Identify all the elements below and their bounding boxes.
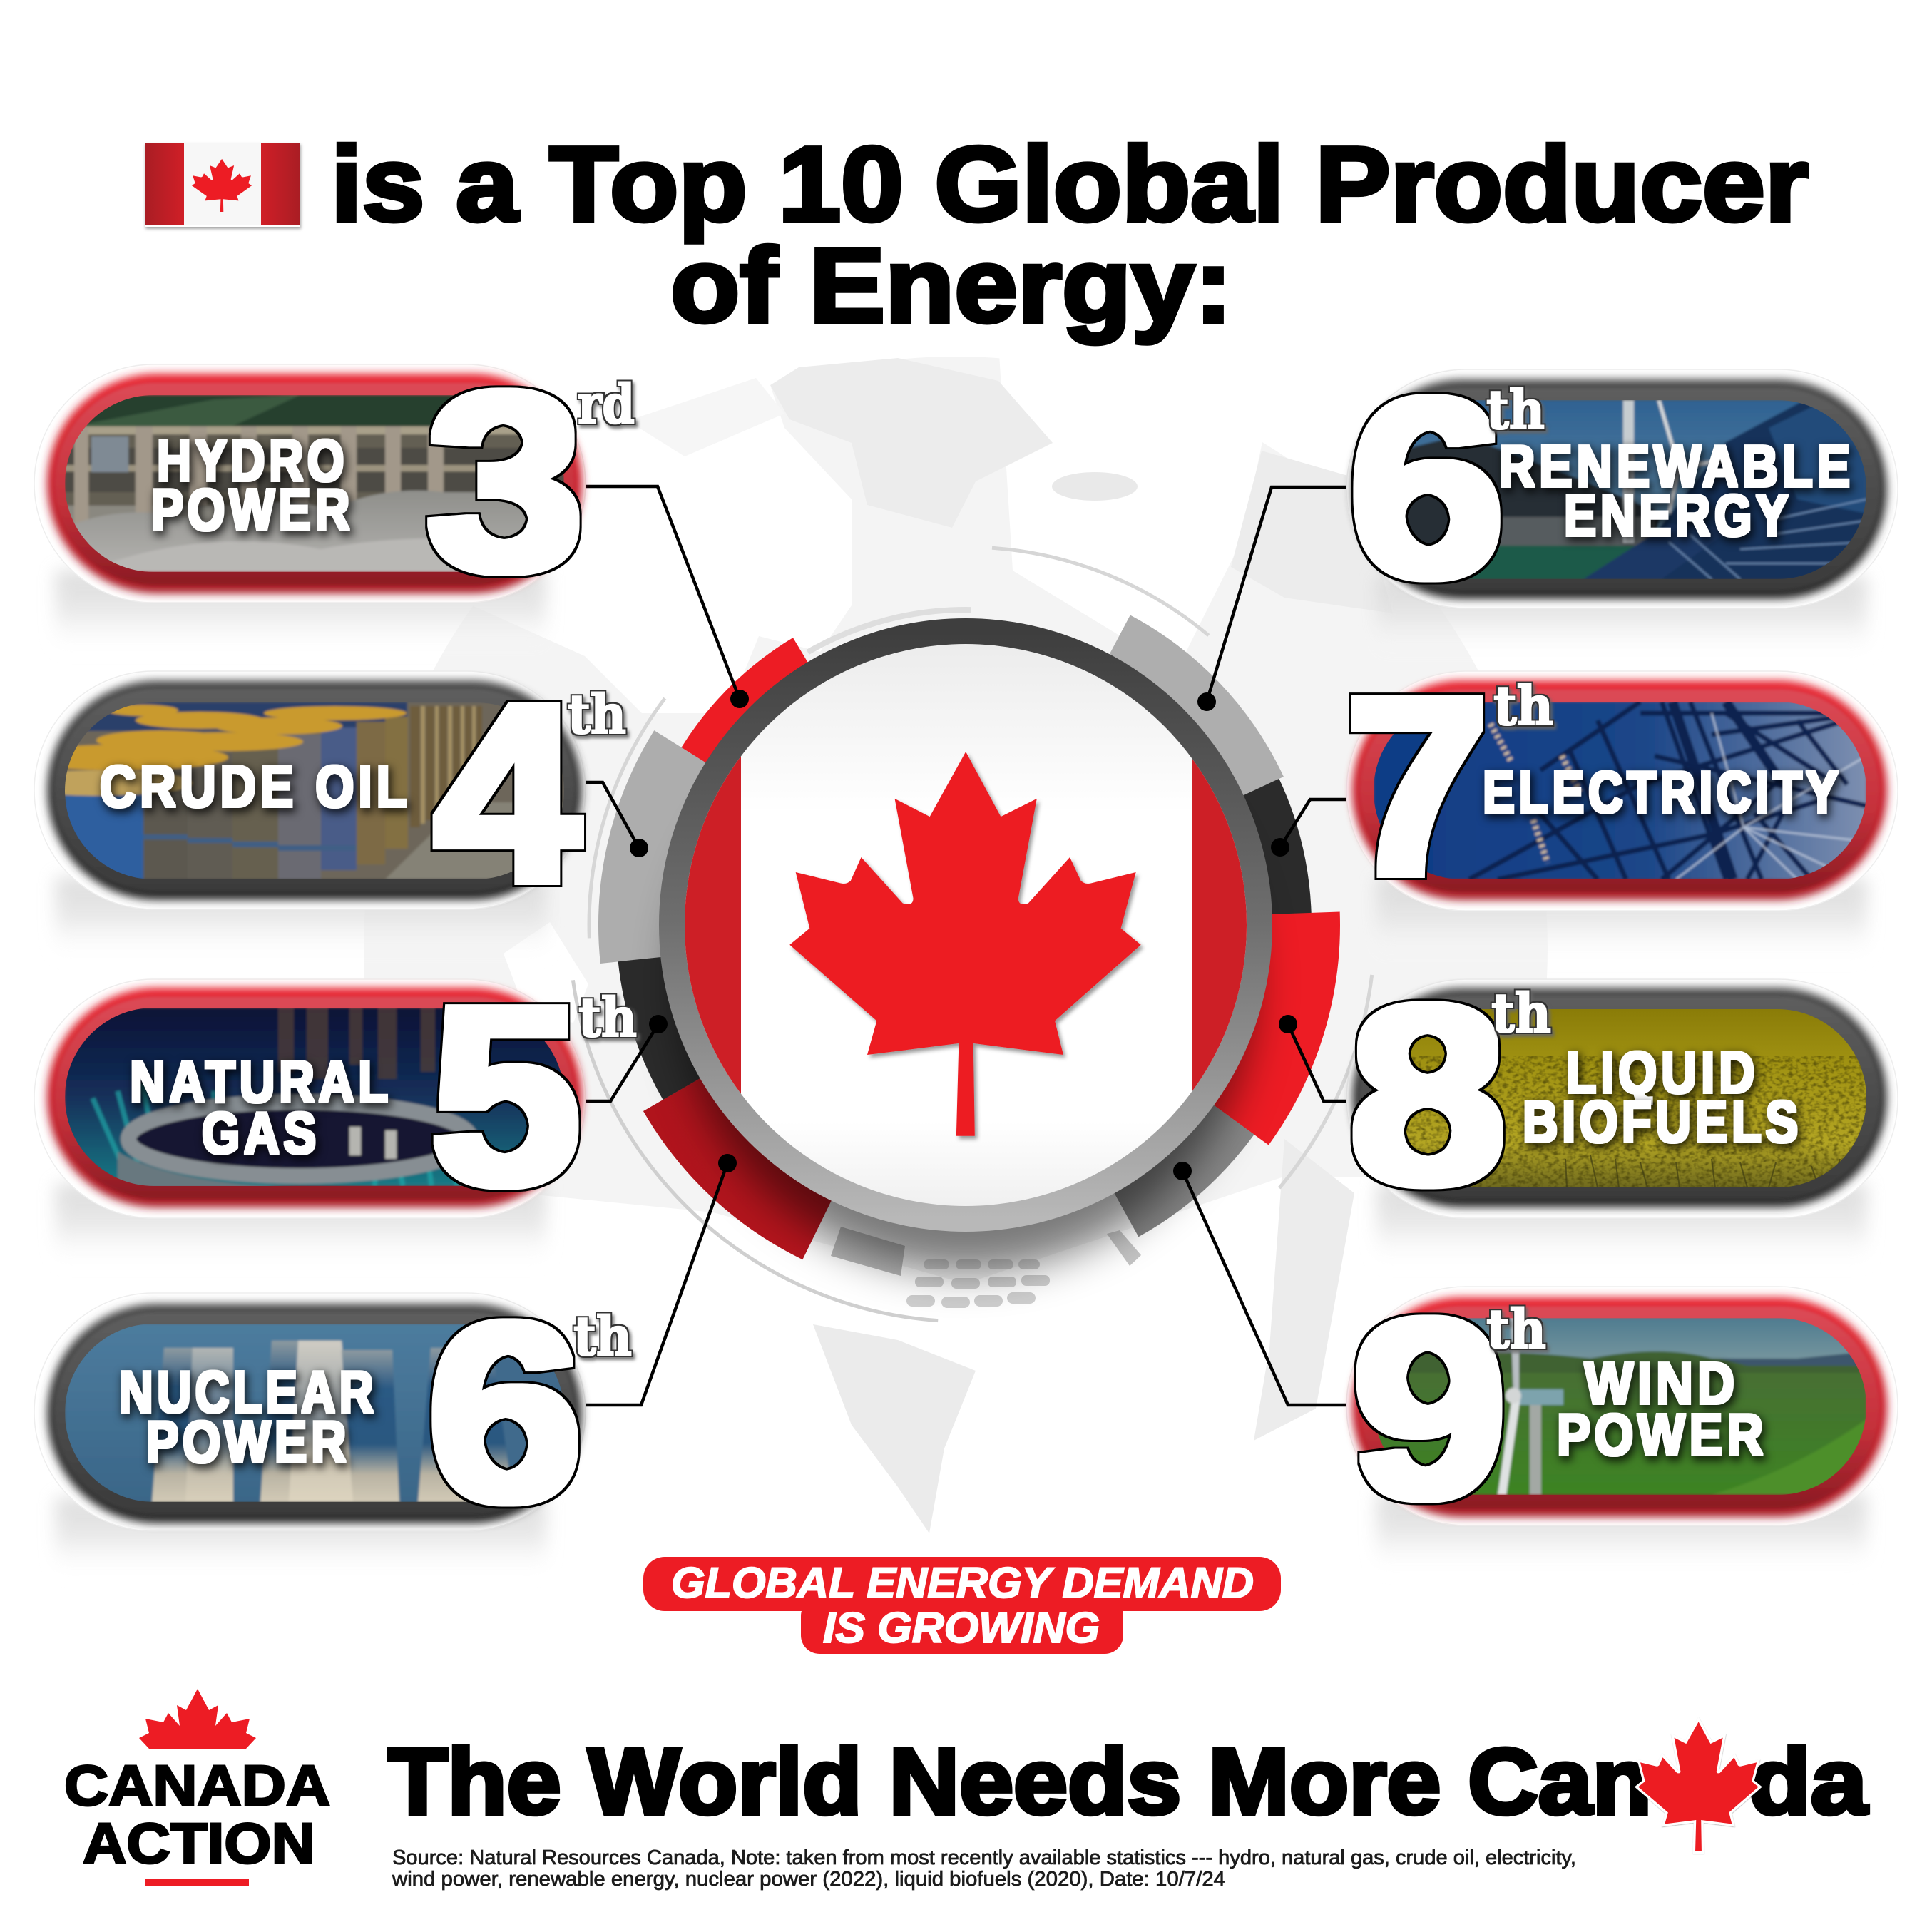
label: nuclear power bbox=[119, 1359, 377, 1475]
icon: maple leaf bbox=[789, 752, 1141, 1136]
hydro dam photo bbox=[65, 395, 571, 572]
rank number 3: 3 bbox=[426, 340, 584, 623]
background world globe bbox=[357, 342, 1569, 1590]
central dial with Canadian flag bbox=[672, 632, 1259, 1218]
panel: hydro power 3rd bbox=[34, 364, 640, 629]
icon: Canadian flag bbox=[145, 143, 300, 227]
title bbox=[331, 126, 1809, 344]
rank suffix th: th bbox=[568, 683, 626, 746]
label: nuclear power: NUCLEAR bbox=[119, 1359, 377, 1425]
panel: nuclear power 6th bbox=[34, 1271, 632, 1576]
label: wind power: WIND bbox=[1585, 1350, 1739, 1416]
label: wind power bbox=[1557, 1350, 1767, 1468]
canola field photo bbox=[1374, 1009, 1866, 1187]
panel: crude oil 4th bbox=[34, 670, 632, 936]
tagline: The World Needs More Canada: da bbox=[1749, 1729, 1868, 1834]
gas burner photo bbox=[65, 1008, 564, 1187]
title: is a Top 10 Global Producer bbox=[331, 126, 1809, 243]
label: liquid biofuels: BIOFUELS bbox=[1523, 1088, 1802, 1155]
logo: Canada Action bbox=[64, 1689, 330, 1886]
rank suffix th: th bbox=[1493, 674, 1553, 737]
callout: global energy demand is growing: IS GROWING bbox=[823, 1604, 1100, 1652]
logo: Canada Action: ACTION bbox=[83, 1811, 315, 1875]
source note: Source: Natural Resources Canada, Note: taken from most recently available statistics --- hydro, natural gas, crude oil, electricity, bbox=[392, 1846, 1576, 1869]
label: liquid biofuels bbox=[1523, 1039, 1802, 1155]
dial segments bbox=[505, 464, 1426, 1386]
connector dots bbox=[630, 690, 1297, 1180]
label: crude oil: CRUDE OIL bbox=[100, 753, 411, 819]
panel: liquid biofuels 8th bbox=[1346, 954, 1898, 1266]
label: wind power: POWER bbox=[1557, 1401, 1767, 1468]
panel: natural gas 5th bbox=[34, 954, 637, 1266]
rank number 7: 7 bbox=[1346, 645, 1488, 928]
rank suffix th: th bbox=[1486, 1297, 1546, 1361]
oil barrels photo bbox=[65, 702, 564, 879]
tagline: The World Needs More Canada bbox=[388, 1722, 1868, 1851]
rank suffix th: th bbox=[1491, 981, 1551, 1045]
dial gadget details below the ring bbox=[831, 1227, 1141, 1308]
title: of Energy: bbox=[670, 227, 1232, 344]
panel: wind power 9th bbox=[1346, 1267, 1898, 1573]
ring cast shadow bbox=[677, 694, 1254, 1272]
label: natural gas: NATURAL bbox=[130, 1048, 392, 1115]
panel: renewable energy 6th bbox=[1346, 347, 1898, 658]
label: hydro power: HYDRO bbox=[157, 427, 348, 494]
label: hydro power: POWER bbox=[151, 476, 354, 543]
rank number 6: 6 bbox=[427, 1271, 583, 1554]
rank number 4: 4 bbox=[434, 652, 581, 935]
label: liquid biofuels: LIQUID bbox=[1566, 1039, 1759, 1105]
tagline: The World Needs More Canada: The World Needs More Can bbox=[388, 1729, 1652, 1834]
rank number 6: 6 bbox=[1349, 347, 1505, 630]
panel: electricity 7th bbox=[1346, 645, 1898, 961]
icon: tagline maple leaf bbox=[1638, 1722, 1759, 1851]
label: nuclear power: POWER bbox=[146, 1409, 350, 1475]
logo: Canada Action: CANADA bbox=[64, 1754, 330, 1817]
renewable energy photo bbox=[1374, 400, 1866, 579]
decorative arcs around the central dial bbox=[509, 469, 1422, 1381]
label: renewable energy bbox=[1499, 433, 1854, 548]
rank number 8: 8 bbox=[1349, 954, 1506, 1237]
rank suffix th: th bbox=[573, 1304, 632, 1368]
label: natural gas: GAS bbox=[202, 1100, 320, 1166]
rank suffix th: th bbox=[578, 986, 637, 1049]
rank number 9: 9 bbox=[1352, 1267, 1507, 1550]
label: natural gas bbox=[130, 1048, 392, 1166]
callout: global energy demand is growing bbox=[643, 1557, 1281, 1654]
cooling towers photo bbox=[65, 1324, 571, 1502]
label: electricity: ELECTRICITY bbox=[1483, 759, 1842, 825]
source note: wind power, renewable energy, nuclear power (2022), liquid biofuels (2020), Date: 10/7/24 bbox=[392, 1868, 1225, 1891]
rank number 5: 5 bbox=[431, 954, 581, 1237]
label: renewable energy: RENEWABLE bbox=[1499, 433, 1854, 499]
power pylon photo bbox=[1374, 702, 1869, 879]
callout: global energy demand is growing: GLOBAL ENERGY DEMAND bbox=[671, 1559, 1254, 1607]
connector lines bbox=[575, 486, 1353, 1405]
label: renewable energy: ENERGY bbox=[1564, 482, 1792, 548]
rank suffix rd: rd bbox=[578, 372, 635, 436]
label: hydro power bbox=[151, 427, 354, 543]
wind turbine field photo bbox=[1374, 1318, 1866, 1495]
source note bbox=[392, 1846, 1576, 1891]
rank suffix th: th bbox=[1486, 378, 1545, 441]
